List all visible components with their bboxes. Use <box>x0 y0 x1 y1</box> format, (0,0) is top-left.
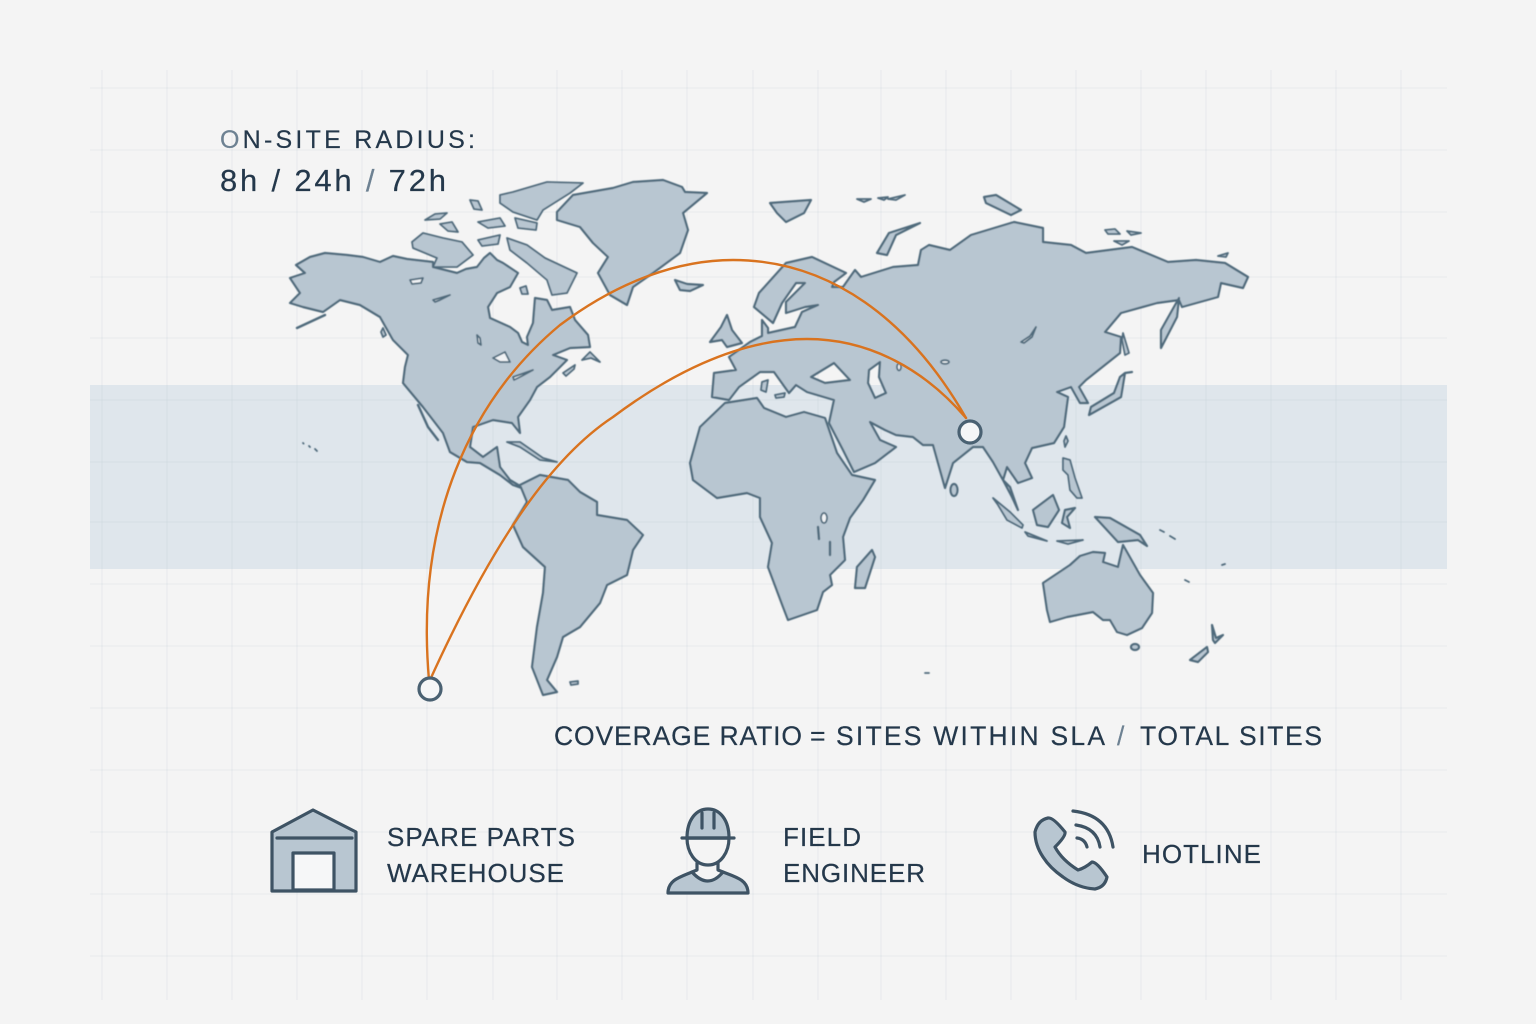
formula: coverage ratio: / <box>1117 721 1125 751</box>
label: spare parts warehouse <box>387 822 575 888</box>
Eurasia <box>710 195 1248 544</box>
heading: on-site radius: ON-SITE RADIUS: <box>220 126 475 154</box>
arc: northern route <box>427 260 966 680</box>
label: field engineer: ENGINEER <box>783 858 925 888</box>
world map <box>290 180 1248 695</box>
label: spare parts warehouse: WAREHOUSE <box>387 858 564 888</box>
Africa <box>690 398 875 620</box>
Iceland <box>675 280 703 291</box>
Greenland <box>557 180 707 305</box>
icon: hotline phone <box>1035 811 1113 889</box>
North America <box>290 182 600 490</box>
icon: field engineer <box>668 809 748 893</box>
route arcs <box>427 260 966 680</box>
icon: warehouse <box>272 810 356 891</box>
Oceania <box>925 517 1225 673</box>
label: hotline: HOTLINE <box>1142 839 1261 869</box>
arc: southern route <box>430 339 966 680</box>
text: radius values: 8h / 24h / 72h <box>220 163 446 198</box>
formula: coverage ratio: = <box>810 721 825 751</box>
Aleutian chain <box>297 315 325 328</box>
formula: coverage ratio <box>554 721 1322 751</box>
Gulf of California <box>418 405 438 440</box>
South America <box>513 475 643 695</box>
formula: coverage ratio: COVERAGE RATIO <box>554 721 802 751</box>
label: field engineer: FIELD <box>783 822 861 852</box>
node: South Pacific origin <box>419 678 441 700</box>
formula: coverage ratio: SITES WITHIN SLA <box>836 721 1105 751</box>
label: field engineer <box>783 822 925 888</box>
node: Bay of Bengal hub <box>959 421 981 443</box>
Hawaii <box>303 443 317 451</box>
latitude band <box>90 385 1447 569</box>
label: spare parts warehouse: SPARE PARTS <box>387 822 575 852</box>
formula: coverage ratio: TOTAL SITES <box>1140 721 1322 751</box>
